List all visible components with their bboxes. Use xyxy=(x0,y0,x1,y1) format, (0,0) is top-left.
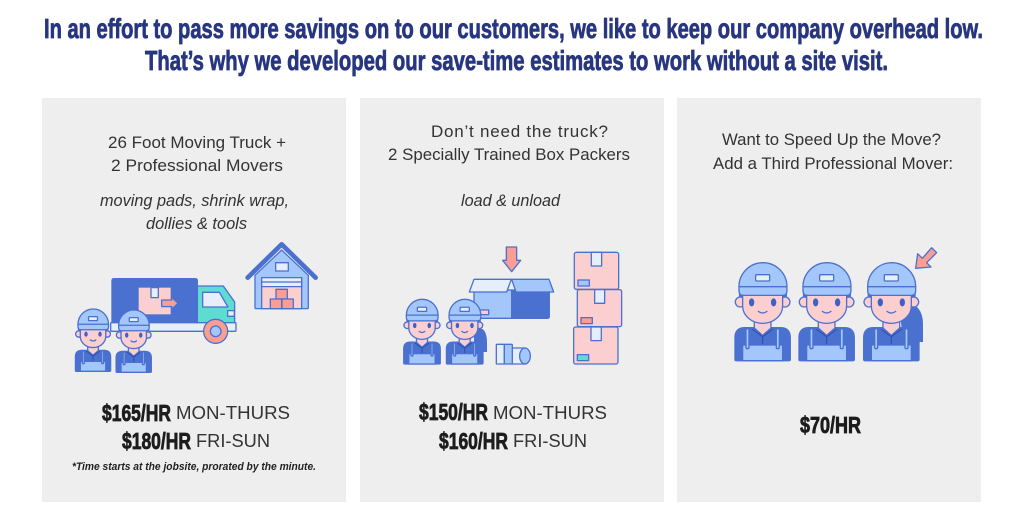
heading: box packers: 2 Specially Trained Box Packers xyxy=(388,145,630,164)
pricing: box packers xyxy=(419,399,607,454)
pricing: box packers: $160/HR xyxy=(439,428,508,454)
pricing: truck and movers: $165/HR xyxy=(102,400,171,426)
pricing: box packers: $150/HR xyxy=(419,399,488,425)
icon: mover two xyxy=(799,263,854,361)
icon: packing tape rolls xyxy=(496,344,530,364)
pricing: truck and movers: $180/HR xyxy=(122,428,191,454)
panel background: third mover xyxy=(677,98,981,502)
panel background: box packers xyxy=(360,98,664,502)
heading: third mover: Want to Speed Up the Move? xyxy=(722,130,941,149)
service text: load & unload xyxy=(461,191,561,210)
pricing: truck and movers: FRI-SUN xyxy=(196,431,270,451)
pricing: truck and movers: MON-THURS xyxy=(176,403,290,423)
icon: open box xyxy=(469,279,554,318)
included equipment text xyxy=(100,191,289,233)
title xyxy=(44,13,983,76)
pricing: box packers: MON-THURS xyxy=(493,403,607,423)
icon: mover one xyxy=(75,309,111,371)
footnote: *Time starts at the jobsite, prorated by the minute. xyxy=(72,461,316,473)
panel background: truck and movers xyxy=(42,98,346,502)
heading: truck and movers: 26 Foot Moving Truck + xyxy=(108,133,286,152)
icon: warehouse xyxy=(248,244,316,309)
heading: box packers: Don’t need the truck? xyxy=(431,122,608,141)
icon: mover one xyxy=(735,263,790,361)
panel: box packers xyxy=(360,98,664,502)
icon: packer two with ponytail xyxy=(446,299,487,364)
heading: truck and movers xyxy=(108,133,286,175)
pricing: third mover: $70/HR xyxy=(800,412,861,438)
pricing: truck and movers xyxy=(102,400,290,454)
icon: moving truck xyxy=(111,279,236,343)
included equipment text: dollies & tools xyxy=(146,214,247,233)
heading: third mover: Add a Third Professional Mover: xyxy=(713,154,953,173)
icon: mover three with ponytail xyxy=(864,263,923,361)
pricing: box packers: FRI-SUN xyxy=(513,431,587,451)
heading: third mover xyxy=(713,130,953,173)
included equipment text: moving pads, shrink wrap, xyxy=(100,191,289,210)
icon: down arrow xyxy=(503,247,521,272)
icon: mover two xyxy=(116,310,151,372)
icon: diagonal arrow xyxy=(916,248,937,268)
panel: third mover xyxy=(677,98,981,502)
icon: stacked boxes xyxy=(574,252,622,364)
icon: packer one xyxy=(404,299,440,364)
panel: truck and movers xyxy=(42,98,346,502)
heading: box packers xyxy=(388,122,630,164)
heading: truck and movers: 2 Professional Movers xyxy=(111,156,283,175)
